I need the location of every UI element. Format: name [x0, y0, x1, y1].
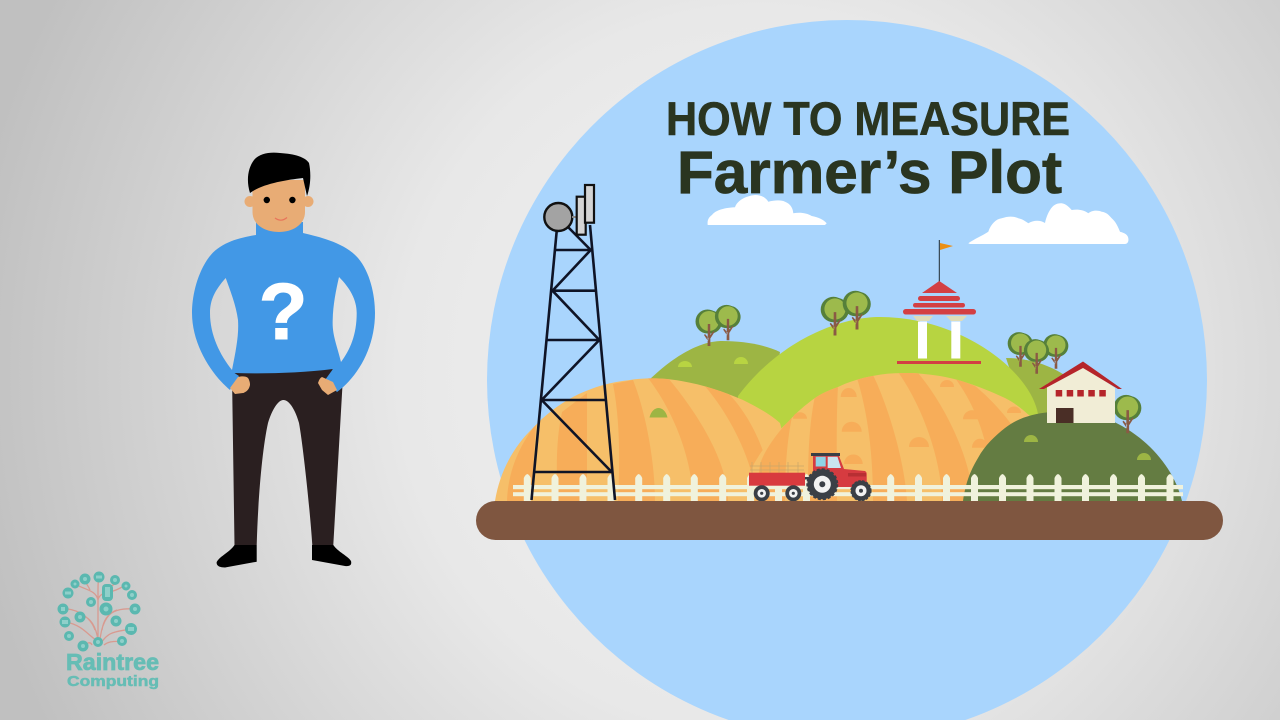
person [192, 153, 375, 568]
hands [230, 376, 337, 395]
sweater [192, 222, 375, 392]
ground bar [476, 501, 1223, 540]
tower [532, 185, 615, 500]
shoes [217, 545, 351, 568]
hill: left olive [648, 341, 780, 410]
hill: dark green [963, 411, 1182, 501]
cloud right [968, 203, 1128, 244]
question mark: ? [259, 267, 307, 356]
orange field left [495, 378, 800, 501]
orange field right [747, 372, 1030, 501]
logo: Raintree Computing [58, 572, 159, 690]
title: HOW TO MEASURE [666, 92, 1070, 145]
trousers [232, 368, 342, 545]
title [666, 92, 1070, 206]
logo: Raintree Computing: Raintree [66, 649, 159, 675]
fence [513, 474, 1183, 501]
cloud left [708, 195, 827, 225]
head [244, 153, 314, 232]
trees [696, 291, 1141, 433]
hill: right olive [1006, 358, 1074, 430]
title: Farmer’s Plot [677, 139, 1062, 206]
hill: bright green [738, 317, 1038, 500]
haystack [650, 408, 668, 418]
logo: Raintree Computing: Computing [67, 673, 159, 690]
house [1039, 362, 1122, 423]
sky circle [487, 20, 1207, 720]
tractor with trailer [749, 453, 871, 501]
pavilion [897, 240, 981, 364]
